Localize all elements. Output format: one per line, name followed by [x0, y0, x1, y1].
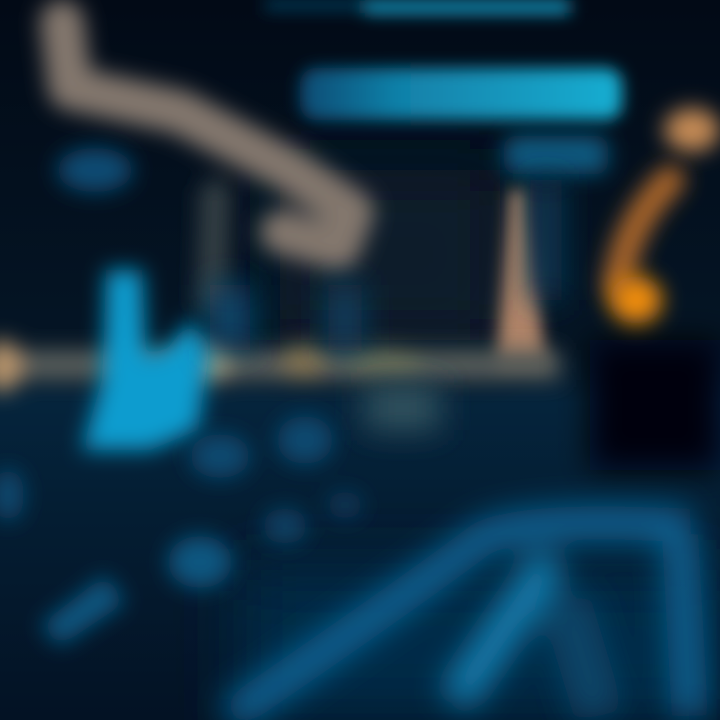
- upper left blue blob: [57, 148, 133, 192]
- orange stroke and glow: [610, 108, 720, 324]
- scattered blue markers: [0, 416, 363, 646]
- bright blue chart shape: [82, 270, 210, 450]
- tan spike: [496, 190, 546, 366]
- blue glow columns: [210, 285, 440, 430]
- small blue bar: [504, 136, 608, 174]
- bottom right curved blue lines: [230, 523, 690, 716]
- top edge bar: [265, 0, 570, 14]
- horizontal axis line with markers: [0, 340, 560, 392]
- dark panel: right side shadow: [590, 340, 720, 470]
- main cyan bar: [300, 68, 622, 120]
- blue column beside the spike: [530, 180, 562, 300]
- beige curved stroke: [62, 22, 352, 300]
